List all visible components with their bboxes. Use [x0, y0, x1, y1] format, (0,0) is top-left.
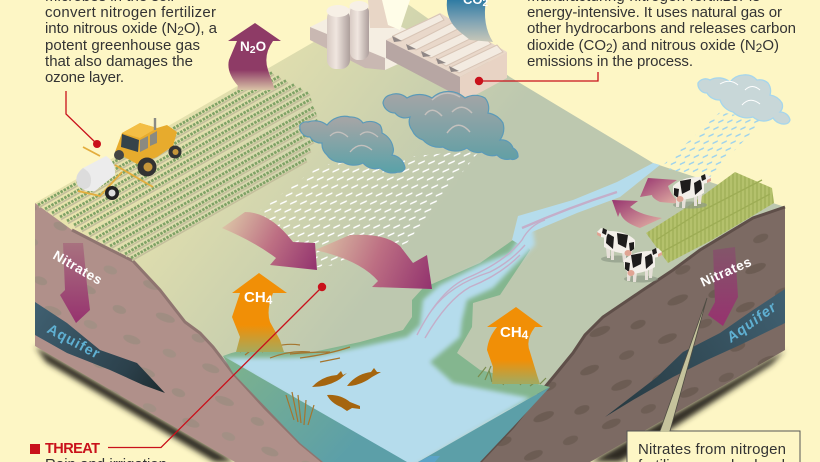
panel: right soil cross-section	[480, 207, 785, 462]
right soil labels: Nitrates	[698, 254, 754, 290]
reeds	[240, 338, 546, 425]
lake front sliver	[407, 456, 440, 462]
methane arrow left: 4	[266, 293, 273, 307]
tractor with sprayer	[76, 118, 182, 200]
methane arrow right: CH	[500, 324, 522, 341]
runoff arrow lower	[612, 200, 662, 228]
right soil labels: Aquifer	[723, 299, 781, 347]
text: manufacturing: dioxide (CO	[527, 37, 606, 54]
methane arrow right	[487, 307, 543, 384]
nitrous oxide arrow: 2	[250, 44, 256, 56]
silos	[326, 1, 369, 69]
text: manufacturing: O)	[762, 37, 779, 54]
callout: nitrates leaching: Nitrates from nitrogen	[638, 441, 786, 458]
right soil labels	[698, 247, 781, 347]
text: microbes	[45, 0, 218, 86]
tank	[76, 156, 115, 191]
fish	[312, 368, 381, 411]
text: manufacturing: other hydrocarbons and releases carbon	[527, 20, 796, 37]
text: manufacturing: 2	[606, 41, 613, 55]
cow on hill	[673, 174, 711, 208]
threat label: THREAT	[45, 441, 100, 457]
stepped building	[386, 13, 507, 98]
carbon dioxide arrow	[447, 0, 493, 42]
left soil labels: Aquifer	[44, 321, 102, 362]
runoff sweep arrow two	[315, 235, 432, 289]
callout: nitrates leaching	[627, 298, 800, 462]
light rain cloud	[698, 75, 790, 124]
crop field rows	[38, 72, 319, 260]
nitrous oxide arrow: N	[240, 39, 250, 54]
runoff arrow upper	[640, 178, 682, 204]
left soil labels	[44, 243, 105, 362]
runoff sweep arrow one	[222, 212, 317, 270]
panel: left soil cross-section	[35, 203, 323, 462]
chassis	[115, 123, 177, 164]
text: microbes: ozone layer.	[45, 69, 124, 86]
pale rain over pasture	[660, 112, 763, 177]
pollution cloud left	[300, 116, 405, 173]
text: manufacturing: energy-intensive. It uses natural gas or	[527, 4, 782, 21]
booms	[78, 147, 153, 196]
left aquifer	[35, 302, 165, 393]
text: microbes: into nitrous oxide (N	[45, 20, 177, 37]
left soil labels: Nitrates	[50, 248, 105, 288]
right water wall	[418, 387, 550, 462]
callout line: threat	[108, 283, 326, 448]
river and lake water	[223, 163, 660, 462]
factory	[310, 0, 507, 98]
methane arrow left	[232, 273, 287, 352]
text: microbes: convert nitrogen fertilizer	[45, 4, 216, 21]
text: microbes: potent greenhouse gas	[45, 37, 200, 54]
callout line: microbes	[66, 91, 101, 148]
text: manufacturing: emissions in the process.	[527, 53, 693, 70]
wheat field	[646, 172, 774, 263]
cow facing left	[597, 228, 635, 262]
rain below pollution clouds	[225, 150, 480, 268]
text: microbes: that also damages the	[45, 53, 193, 70]
text: microbes: O), a	[184, 20, 218, 37]
right aquifer	[605, 289, 785, 417]
nitrates arrow right	[708, 247, 738, 326]
river bank	[223, 235, 550, 462]
callout line: manufacturing	[475, 72, 598, 85]
pollution cloud right	[383, 91, 518, 160]
nitrous oxide arrow: O	[256, 39, 266, 54]
wheels	[105, 146, 182, 200]
methane arrow left: CH	[244, 289, 266, 306]
block shadow	[35, 346, 785, 462]
river silt streaks	[417, 192, 617, 338]
text: microbes: 2	[177, 24, 184, 38]
nitrous oxide arrow	[228, 23, 281, 90]
methane arrow right: 4	[522, 328, 529, 342]
text: manufacturing: ) and nitrous oxide (N	[613, 37, 756, 54]
text: manufacturing	[527, 0, 796, 70]
nitrates arrow left	[60, 243, 90, 323]
text: manufacturing: 2	[756, 41, 763, 55]
threat label	[30, 441, 167, 462]
left water wall	[223, 356, 407, 462]
cow front	[624, 248, 662, 282]
